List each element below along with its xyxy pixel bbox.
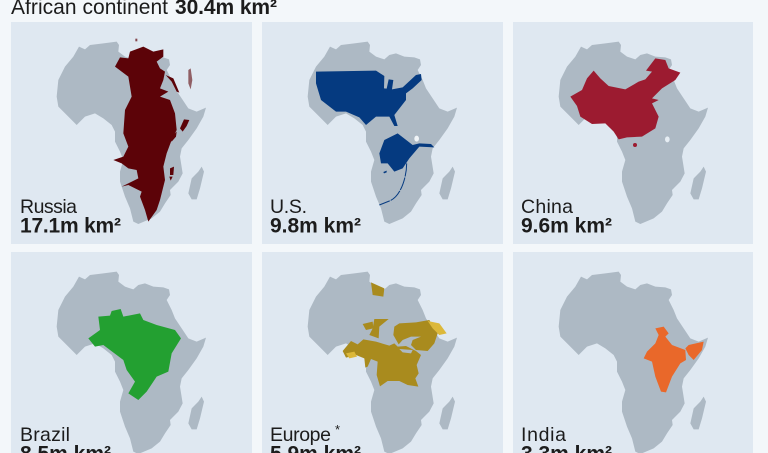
label: Brazil: [20, 424, 111, 453]
label: China: China: [521, 196, 573, 218]
map: U.S. over Africa: [308, 42, 457, 224]
label: India: India: [521, 424, 566, 446]
map: Brazil over Africa: [57, 272, 206, 453]
label: Europe: Europe: [270, 424, 331, 446]
panel: India: [513, 252, 753, 453]
label: China: [521, 196, 612, 238]
label: Russia: [20, 196, 121, 238]
map: China over Africa: [559, 42, 708, 224]
panel: U.S.: [262, 22, 503, 244]
label: India: [521, 424, 612, 453]
map: India over Africa: [559, 272, 708, 453]
label: Europe: [270, 422, 361, 453]
label: U.S.: [270, 196, 361, 238]
label: Russia: Russia: [20, 196, 77, 218]
panel: China: [513, 22, 753, 244]
label: U.S.: U.S.: [270, 196, 307, 218]
panel: Brazil: [11, 252, 252, 453]
title: [11, 0, 277, 19]
panel: Europe: [262, 252, 503, 453]
label: U.S.: 9.8m km²: [270, 214, 361, 238]
map: Russia over Africa: [57, 39, 206, 224]
label: China: 9.6m km²: [521, 214, 612, 238]
label: Brazil: Brazil: [20, 424, 70, 446]
label: Russia: 17.1m km²: [20, 214, 121, 238]
label: Europe: *: [335, 422, 340, 437]
panel: Russia: [11, 22, 252, 244]
map: Europe over Africa: [308, 272, 457, 453]
